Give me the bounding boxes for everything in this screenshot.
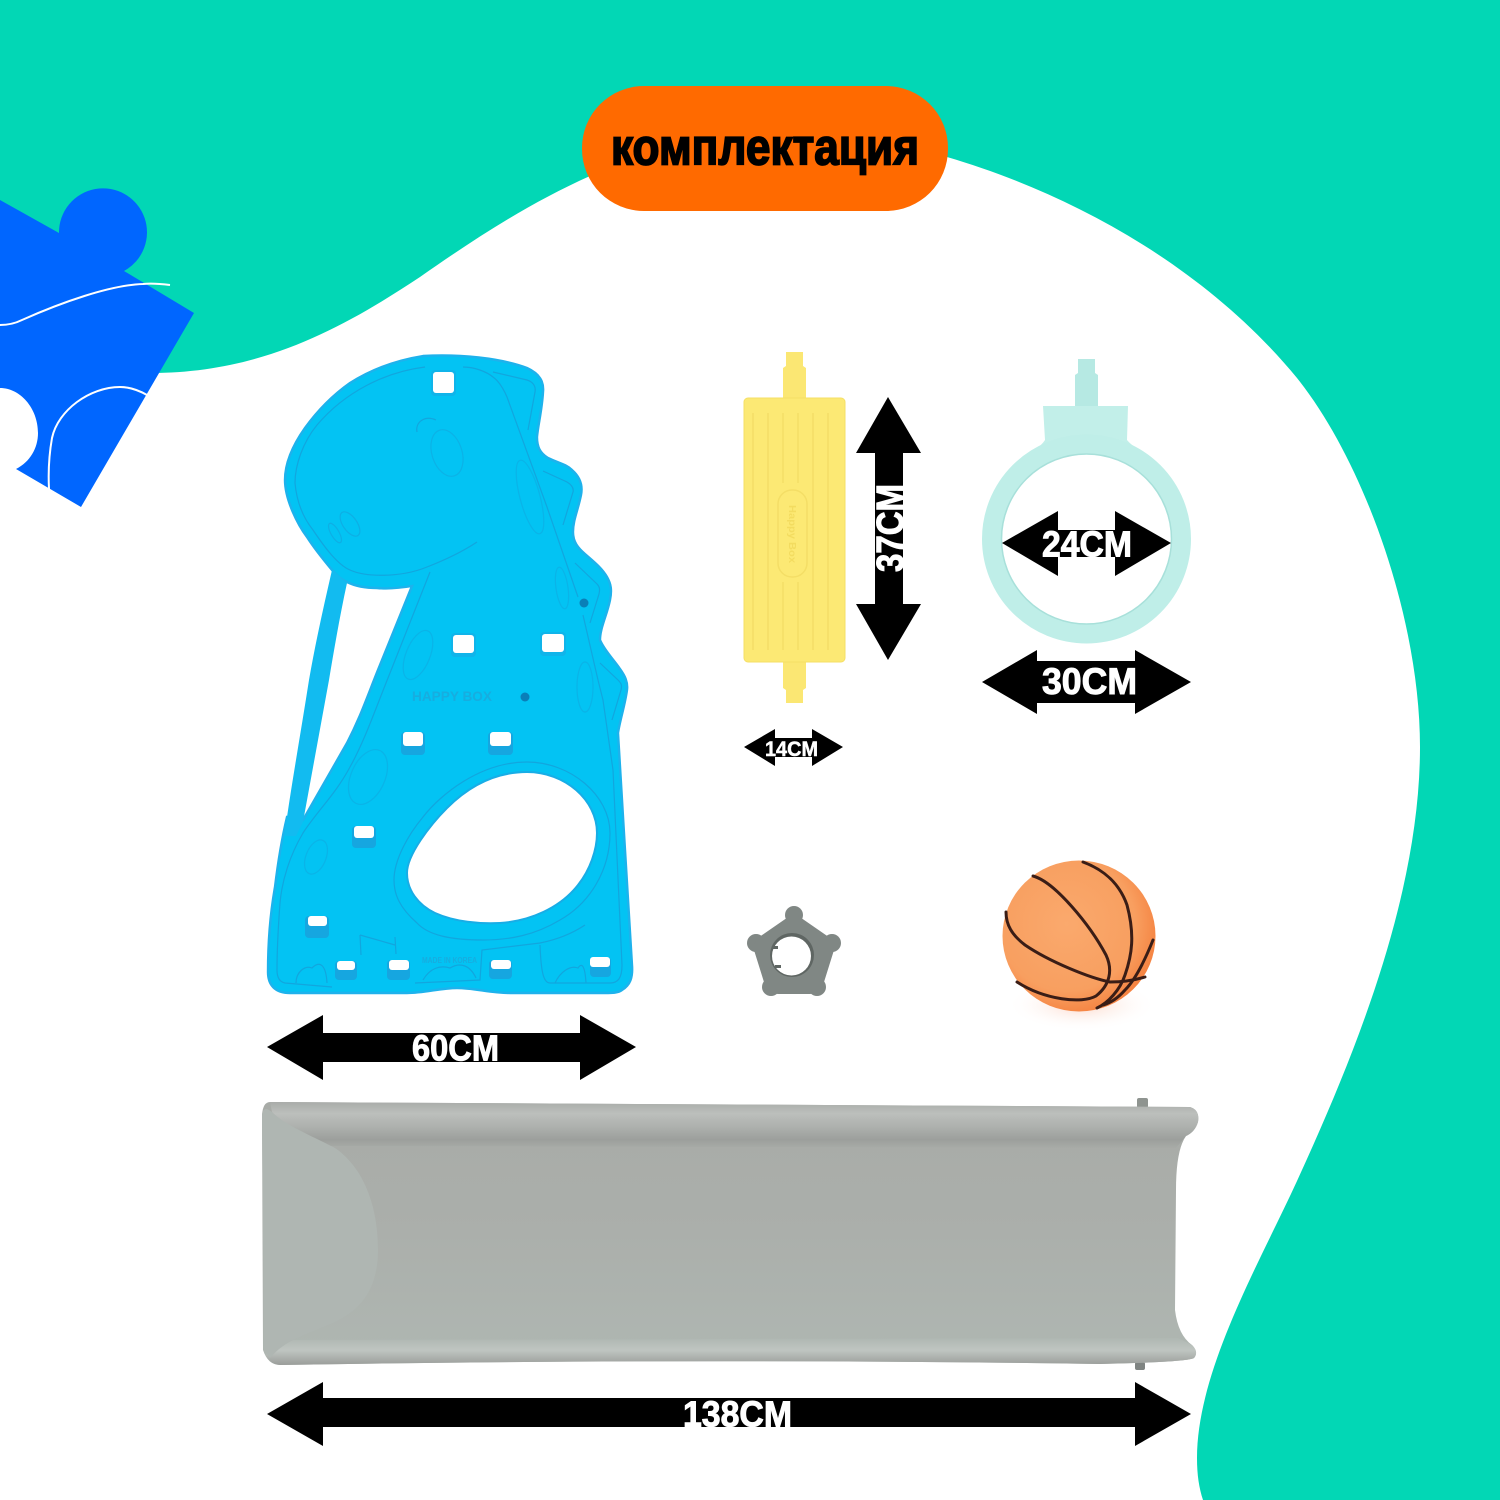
panel: mint hoop (992, 359, 1181, 634)
title pill (582, 86, 948, 211)
icon: grey nut (747, 906, 841, 996)
dinosaur slot recesses (305, 370, 611, 980)
icon: blue puzzle piece (0, 188, 194, 507)
dimension arrow: 37CM: 37CM (870, 484, 912, 572)
panel: yellow step (744, 352, 845, 703)
dinosaur moulded logo text (412, 688, 493, 965)
dimension arrow: 138CM: 138CM (683, 1394, 792, 1434)
slide top rim (270, 1102, 1198, 1148)
dinosaur body (268, 356, 632, 993)
dinosaur dots (520, 598, 588, 702)
step screw ends (783, 352, 806, 398)
dinosaur moulded logo text: HAPPY BOX (412, 688, 493, 704)
dinosaur embossed lines (277, 367, 622, 987)
dimension arrow: 14CM (744, 729, 843, 766)
title text: комплектация (611, 118, 919, 176)
step body (744, 398, 845, 662)
dinosaur moulded logo text: MADE IN KOREA (422, 956, 477, 965)
dimension arrow: 30CM (982, 650, 1191, 714)
dimension arrow: 37CM (856, 397, 921, 660)
dimension arrow: 60CM (267, 1015, 636, 1080)
dimension arrow: 24CM: 24CM (1042, 524, 1132, 564)
slide left lip (262, 1109, 378, 1358)
dinosaur strut (284, 570, 347, 836)
slide pins (1137, 1098, 1148, 1108)
dimension arrow: 138CM (267, 1382, 1191, 1446)
hoop stem (1075, 359, 1098, 406)
panel: blue dinosaur slide side (268, 356, 632, 993)
dimension arrow: 24CM (1002, 511, 1171, 576)
step grooves (753, 413, 828, 650)
hoop ring (992, 444, 1181, 634)
dinosaur egg-shaped hole (407, 772, 597, 923)
hoop bracket (1030, 406, 1144, 452)
step moulded logo: Happy Box (786, 505, 797, 563)
slide bottom rim (266, 1338, 1196, 1365)
dinosaur slot holes (308, 372, 610, 970)
panel: grey slide (262, 1098, 1198, 1370)
dimension arrow: 60CM: 60CM (412, 1028, 499, 1068)
dimension arrow: 30CM: 30CM (1042, 661, 1137, 702)
slide base (262, 1102, 1198, 1365)
dimension arrow: 14CM: 14CM (765, 738, 818, 761)
icon: basketball (1002, 860, 1157, 1031)
